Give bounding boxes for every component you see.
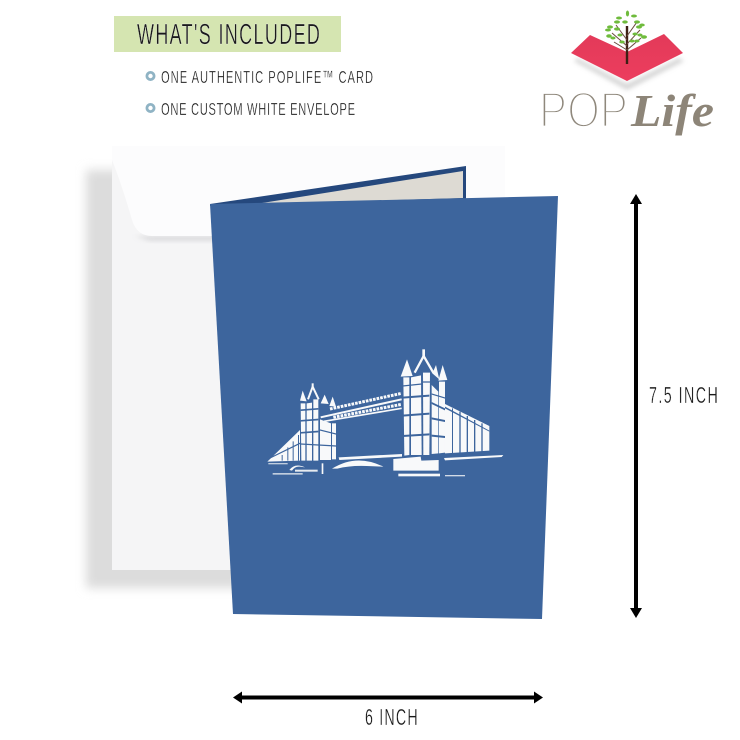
card front (210, 196, 558, 619)
arrow: height dimension (630, 194, 642, 618)
logo wordmark POP: POP (539, 82, 628, 138)
greeting card (210, 166, 558, 619)
tower bridge cutout (267, 349, 503, 476)
right span (445, 404, 489, 453)
label: width: 6 INCH (365, 706, 418, 731)
river and boats (339, 454, 402, 460)
logo wordmark Life: Life (630, 85, 714, 136)
logo book (571, 34, 683, 81)
bullet: envelope (147, 104, 154, 112)
envelope (86, 146, 505, 588)
text: card item: ONE AUTHENTIC POPLIFE™ CARD (161, 67, 373, 88)
card inside (262, 171, 463, 204)
envelope body (112, 146, 505, 570)
list: included items (147, 67, 373, 120)
left tower (300, 383, 336, 461)
label: height: 7.5 INCH (649, 384, 718, 409)
card back (210, 166, 466, 206)
arrow: width dimension (233, 692, 543, 704)
bullet: card (147, 72, 154, 80)
envelope flap shadow (135, 236, 300, 241)
left span (267, 430, 300, 462)
heading: what's included: WHAT'S INCLUDED (137, 19, 320, 51)
logo tree (605, 10, 647, 64)
right tower (401, 349, 447, 456)
logo: PopLife (539, 10, 714, 138)
text: envelope item: ONE CUSTOM WHITE ENVELOPE (161, 99, 355, 120)
envelope flap (112, 146, 505, 236)
envelope shadow (86, 170, 256, 588)
walkways (321, 393, 402, 421)
blue gaps (270, 381, 489, 461)
logo shadow (574, 58, 684, 90)
